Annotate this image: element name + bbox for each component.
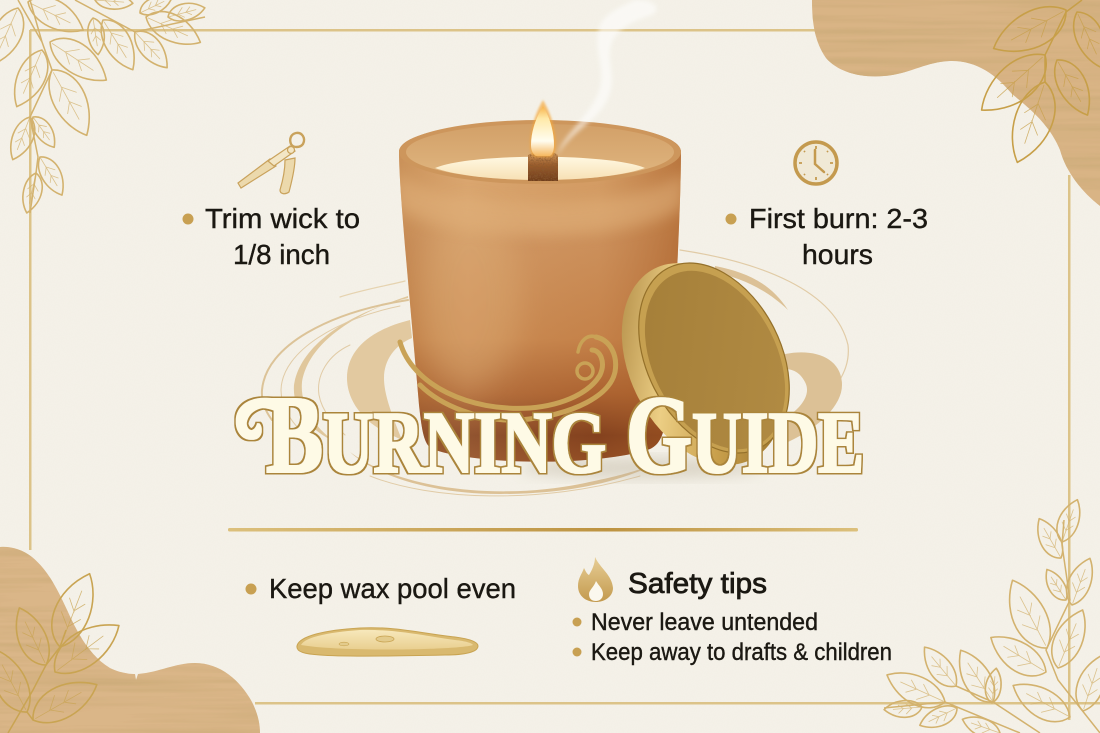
heading: safety tips: Safety tips [628,568,767,600]
swirl rings behind the candle [262,250,848,496]
title: Burning Guide [237,374,864,497]
tip: trim wick [182,203,360,270]
tip: first burn [726,203,928,270]
tip: first burn: First burn: 2-3 [749,203,928,234]
smoke [558,0,657,155]
leaves: bottom left corner [0,567,128,733]
safety tips list: Never leave untended [591,609,818,636]
wood blob: top right [812,0,1100,206]
title: Burning Guide: URNING [323,395,606,492]
wax surface [435,157,645,180]
safety tips list [572,609,892,666]
leaves: top left corner [0,0,207,215]
jar cast shadow [520,458,760,478]
flame [531,106,554,156]
leaves: bottom right corner [880,496,1100,733]
icon: safety flame [578,557,613,602]
title: Burning Guide: UIDE [692,395,864,492]
icon: wick trimmer [238,133,304,194]
tip: first burn: hours [802,239,873,270]
tip: keep wax pool even: Keep wax pool even [269,573,516,604]
icon: clock [795,142,837,184]
divider [228,528,858,532]
tip: trim wick: Trim wick to [205,203,360,234]
flame glow [530,100,556,157]
leaves: top right corner [971,0,1100,169]
safety tips list: Keep away to drafts & children [591,639,892,666]
icon: wax pool [297,628,478,656]
tip: trim wick: 1/8 inch [233,239,330,270]
wick [528,151,558,181]
title swash on B [237,399,276,439]
candle jar [395,0,760,478]
jar rim and inner wall [399,120,681,184]
wood blob: bottom left [0,547,260,733]
title: Burning Guide: G [626,374,692,497]
gold lid [589,236,820,492]
gold swirl on jar [400,336,616,420]
title: Burning Guide: B [266,374,323,497]
jar body [395,118,685,463]
